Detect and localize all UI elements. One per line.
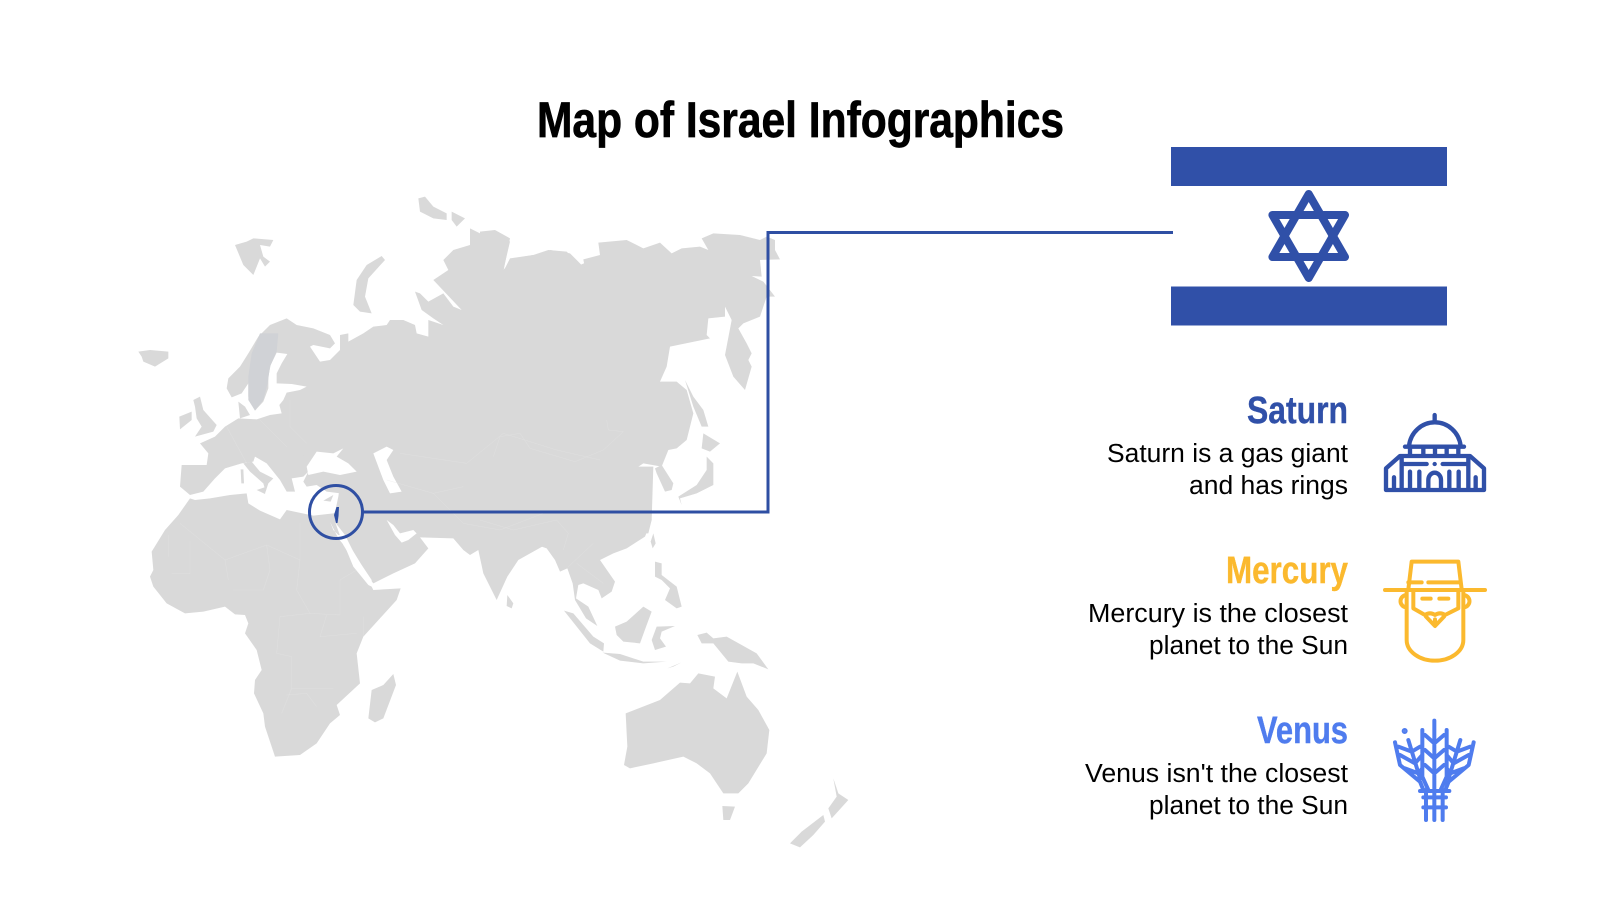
flag of Israel — [1171, 147, 1447, 326]
map: Madagascar — [368, 674, 396, 722]
item: Mercury: Mercury is the closest — [1088, 600, 1348, 628]
Israel marker — [334, 507, 339, 523]
icon: wheat sheaf — [1395, 721, 1474, 820]
map: inland seas — [307, 447, 417, 587]
item: Saturn: and has rings — [1189, 472, 1348, 500]
title: Map of Israel Infographics — [537, 92, 1064, 148]
item: Mercury: planet to the Sun — [1149, 632, 1348, 660]
item: Venus: Venus isn't the closest — [1085, 760, 1348, 788]
map: New Zealand — [828, 778, 848, 818]
map: Iceland — [138, 350, 168, 367]
map: country borders — [168, 400, 623, 713]
icon: star of David — [1272, 194, 1345, 278]
item: Mercury — [1088, 550, 1348, 660]
map: south Asia and Arabia — [150, 453, 543, 757]
item: Mercury: Mercury — [1226, 550, 1348, 592]
map: Sweden highlight — [248, 333, 278, 411]
item: Venus: Venus — [1257, 710, 1348, 752]
item: Saturn — [1107, 390, 1348, 500]
item: Saturn: Saturn is a gas giant — [1107, 440, 1348, 468]
icon: dome building — [1386, 415, 1484, 490]
map: western Eurasia — [138, 197, 600, 503]
map: Australia — [624, 672, 769, 793]
map: eastern Eurasia — [480, 230, 780, 533]
item: Saturn: Saturn — [1247, 390, 1348, 432]
item: Venus — [1085, 710, 1348, 820]
map: Africa — [150, 493, 401, 757]
map: Southeast Asia and Oceania — [530, 467, 848, 847]
item: Venus: planet to the Sun — [1149, 792, 1348, 820]
icon: man with hat — [1385, 562, 1485, 661]
world map — [138, 197, 848, 847]
location circle — [310, 486, 362, 538]
connector line — [363, 232, 1173, 512]
